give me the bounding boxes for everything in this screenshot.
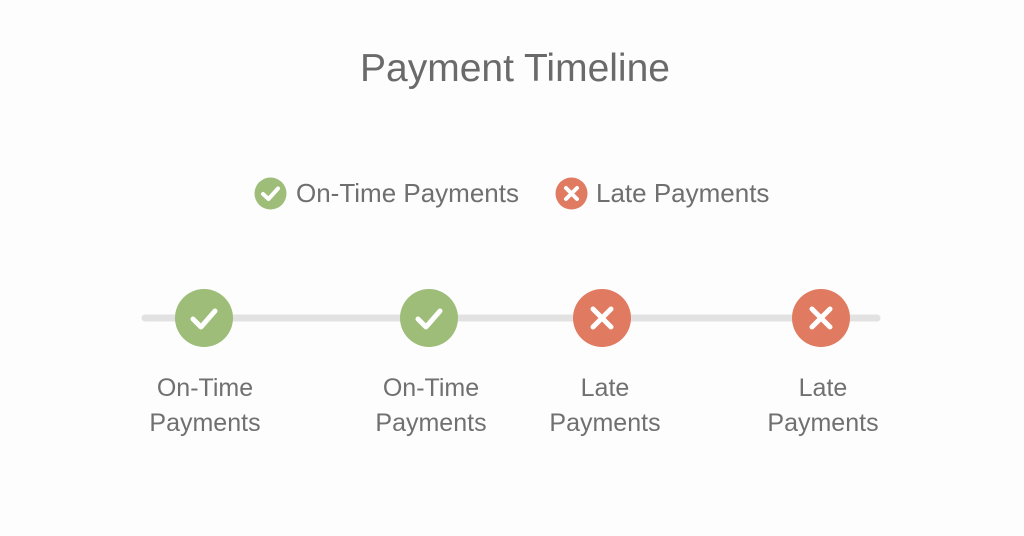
legend: late: Late Payments xyxy=(596,178,769,208)
label 1: Payments xyxy=(149,409,261,437)
label 3: Late xyxy=(581,374,629,402)
label 4 xyxy=(767,374,879,437)
label 2: Payments xyxy=(375,409,487,437)
label 3: Payments xyxy=(549,409,661,437)
label 1: On-Time xyxy=(157,374,253,402)
legend xyxy=(254,178,769,210)
timeline xyxy=(142,289,880,347)
marker 4 late xyxy=(792,289,850,347)
label 2: On-Time xyxy=(383,374,479,402)
label 3 xyxy=(549,374,661,437)
marker 3 late xyxy=(573,289,631,347)
marker 1 on-time xyxy=(175,289,233,347)
title: Payment Timeline xyxy=(360,47,670,90)
legend: on-time: On-Time Payments xyxy=(296,178,519,208)
label 4: Payments xyxy=(767,409,879,437)
label 1 xyxy=(149,374,261,437)
label 4: Late xyxy=(799,374,847,402)
label 2 xyxy=(375,374,487,437)
marker 2 on-time xyxy=(400,289,458,347)
